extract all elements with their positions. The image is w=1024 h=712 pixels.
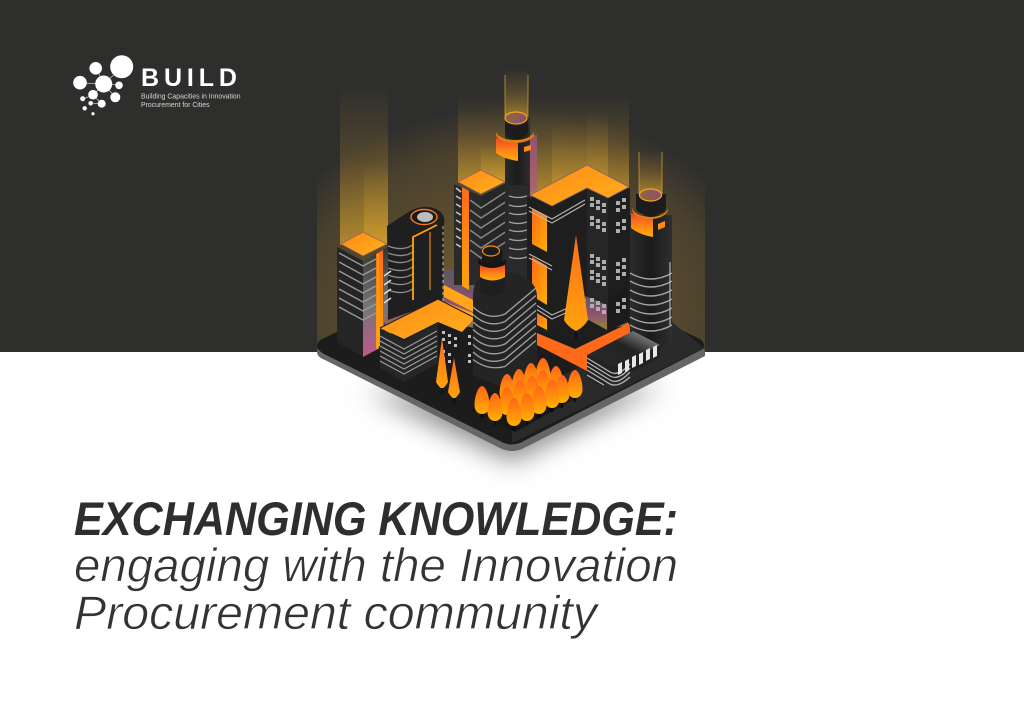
colored glass between buildings xyxy=(385,270,525,340)
big right building xyxy=(527,165,630,340)
building: left tower with orange roof xyxy=(337,232,391,357)
orange windows xyxy=(532,208,547,330)
trees xyxy=(474,358,582,426)
dark tree base xyxy=(468,386,580,432)
building: chevron tower with orange roof xyxy=(454,170,508,292)
front round building xyxy=(473,246,537,395)
tree cluster xyxy=(468,358,582,432)
title line 2: engaging with the Innovation xyxy=(74,538,678,592)
central tall tower xyxy=(496,75,537,300)
chevron lines xyxy=(529,200,586,319)
title line 1: EXCHANGING KNOWLEDGE: xyxy=(74,492,678,545)
illustration: isometric city xyxy=(317,74,706,476)
small orange cones xyxy=(436,338,460,404)
collar xyxy=(496,131,534,143)
right front cylindrical tower xyxy=(630,152,672,349)
logo: BUILD xyxy=(73,55,242,115)
platform shadow xyxy=(365,385,665,462)
logo mark: connected circles xyxy=(73,55,133,115)
window grids xyxy=(590,197,606,314)
dark header background xyxy=(0,0,1024,352)
platform xyxy=(317,250,705,451)
title line 3: Procurement community xyxy=(74,586,600,639)
orange band xyxy=(631,213,653,237)
logo tagline: Procurement for Cities xyxy=(141,102,210,109)
roof xyxy=(530,165,629,206)
title xyxy=(74,492,678,639)
orange L-shaped plaza xyxy=(537,323,631,371)
tree trunks xyxy=(482,397,575,431)
light beams xyxy=(340,68,662,245)
logo tagline: Building Capacities in Innovation xyxy=(141,94,241,100)
collar xyxy=(632,207,668,219)
low orange-roof building xyxy=(380,285,473,382)
building: rounded pill with ring xyxy=(387,207,444,320)
pink side glow xyxy=(528,135,537,194)
orange band xyxy=(496,138,518,161)
shaft xyxy=(505,125,530,300)
logo wordmark: BUILD xyxy=(141,64,242,92)
small tower on top xyxy=(480,264,505,296)
glow halo behind city xyxy=(317,119,705,352)
orange cone tower xyxy=(564,235,588,340)
low front-right building xyxy=(587,331,660,385)
